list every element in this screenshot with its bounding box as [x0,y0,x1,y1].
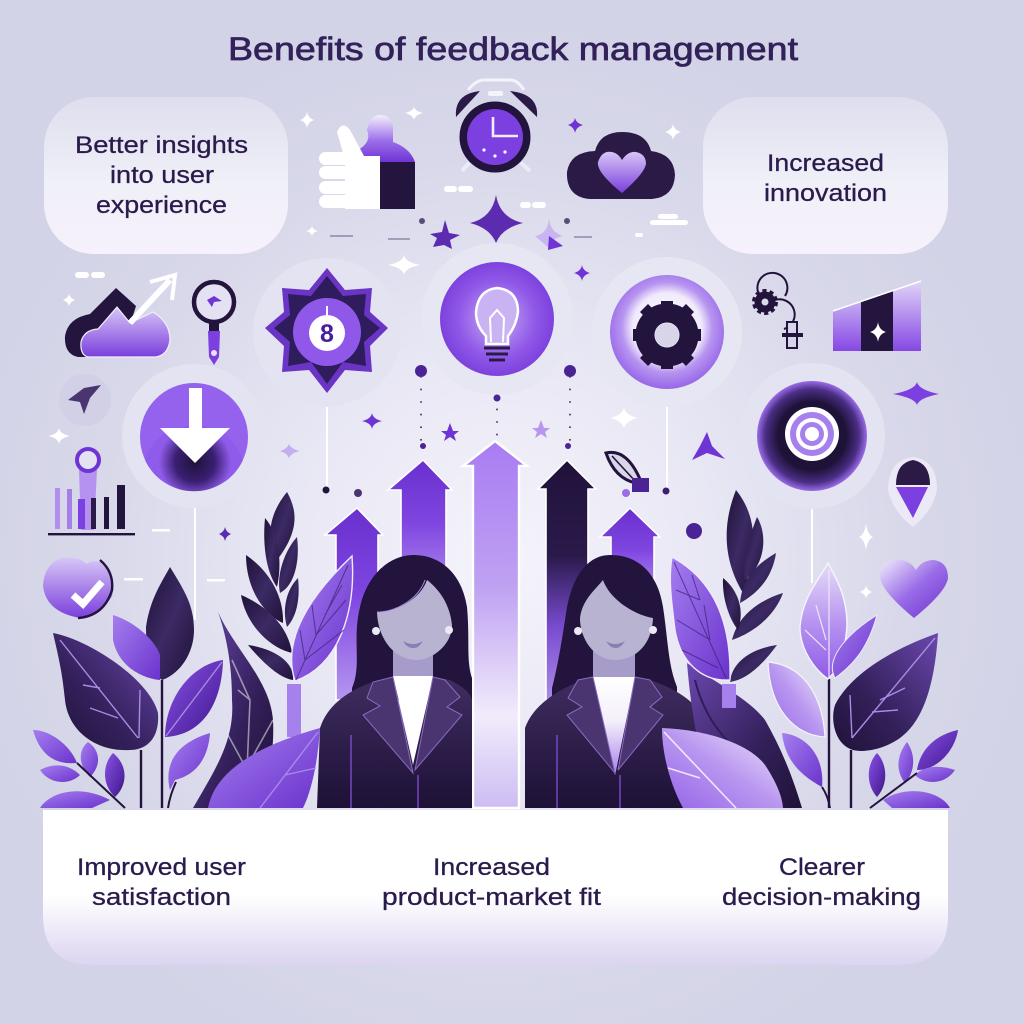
connector lines and dots [195,365,812,620]
panel: bottom benefits: decision-making [722,884,921,911]
panel: better insights: Better insights [75,132,248,159]
panel: bottom benefits: Clearer [779,854,865,881]
icon: heart with check [43,558,113,618]
icon badge: gear [592,257,742,407]
icon: cloud with heart [567,132,675,199]
arrow: far left [325,508,383,700]
panel: bottom benefits: product-market fit [382,884,601,911]
icon: mountain chart [63,272,175,357]
leaves: right tall fern [670,490,783,708]
arrows [325,441,660,808]
icon: linked gears [754,273,803,348]
panel: bottom benefits: satisfaction [92,884,231,911]
arrow: left [388,460,452,600]
panel: increased innovation [703,97,948,254]
panel: increased innovation: Increased [767,150,884,177]
title: Benefits of feedback management [228,31,798,67]
panel: bottom benefits [43,810,948,965]
panel: bottom benefits: Increased [433,854,550,881]
panel: increased innovation: innovation [764,180,887,207]
leaves: far left cluster [33,567,223,808]
panel: better insights: into user [110,162,214,189]
sparkles: middle area [48,374,939,598]
figure: woman left [317,555,472,808]
sparkles: top area [300,107,688,281]
icon: bar chart [48,449,135,535]
icon: pin [888,457,937,527]
leaves: left tall fern [193,492,353,808]
panel: better insights: experience [96,192,227,219]
arrow: right [538,460,596,700]
icon: alarm clock [456,78,537,173]
arrow: center [463,441,527,808]
panel: bottom benefits: Improved user [77,854,246,881]
icon badge: star 8 [253,258,401,406]
icon: magnifier [194,282,234,365]
leaves: far right cluster [768,563,958,808]
icon: thumbs up [319,115,415,209]
leaves: center right big leaves [662,663,802,808]
icon badge: down arrow [122,364,266,508]
icon: flag banner [833,281,921,351]
icon badge: light bulb [421,243,573,395]
icon badge: target [739,363,885,509]
panel: better insights [44,97,288,254]
figure: woman right [525,555,708,808]
icon: heart right [880,560,948,618]
icon: small leaf with flag [606,452,649,492]
arrow: far right [600,508,660,600]
icon badge: star 8: 8 [320,320,334,348]
